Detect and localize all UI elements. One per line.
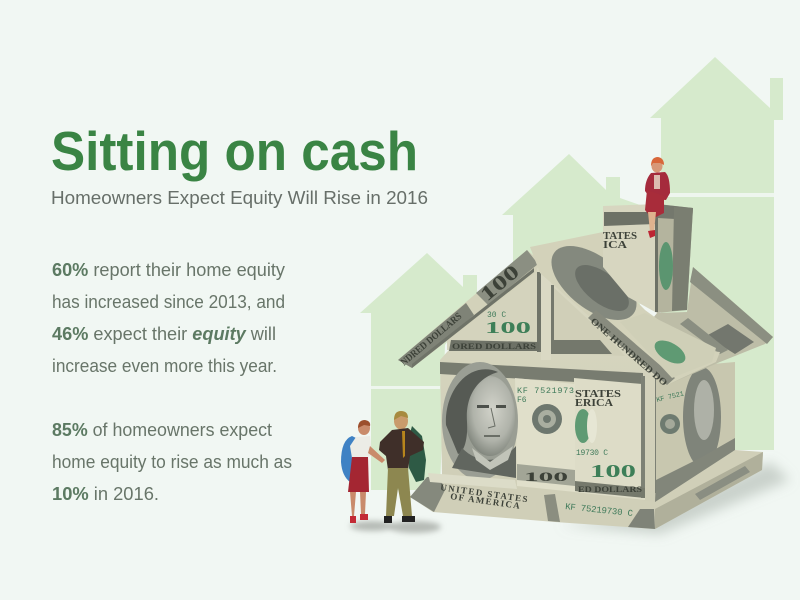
base of folded bills bbox=[410, 450, 763, 529]
left roof: 100 bbox=[476, 261, 524, 306]
front wall with bills bbox=[440, 255, 655, 502]
background arrows: rising green houses bbox=[360, 57, 783, 490]
right roof behind chimney bbox=[640, 267, 773, 385]
door bill with seal: F6 bbox=[517, 396, 527, 405]
text block: expectations: 85% of homeowners expect bbox=[52, 420, 272, 440]
text block: equity growth: has increased since 2013, and bbox=[52, 292, 285, 312]
couple shadows bbox=[350, 521, 441, 533]
chimney: TATES bbox=[603, 230, 637, 242]
text block: expectations: home equity to rise as much as bbox=[52, 452, 292, 472]
door bill with seal: KF 7521973 bbox=[517, 386, 574, 396]
hair and head bbox=[652, 160, 662, 172]
text block: equity growth: 46% expect their equity will bbox=[52, 324, 276, 344]
front wall with bills: 19730 C bbox=[576, 449, 608, 458]
centre strip bbox=[541, 265, 551, 360]
side wall: KF 7521 bbox=[656, 390, 685, 405]
side wall bbox=[645, 362, 735, 502]
base of folded bills: UNITED STATES bbox=[440, 482, 528, 504]
left gable bill bbox=[447, 268, 541, 350]
large house arrow bbox=[650, 57, 783, 450]
text block: expectations bbox=[52, 420, 292, 504]
chimney: ICA bbox=[603, 239, 627, 251]
front wall with bills: STATES bbox=[575, 388, 621, 400]
door bill with seal bbox=[515, 378, 575, 492]
jacket bbox=[645, 172, 670, 200]
door bill with seal: 100 bbox=[524, 469, 568, 484]
figure: woman on chimney bbox=[645, 157, 670, 238]
front wall with bills: ORED DOLLARS bbox=[452, 341, 536, 351]
front wall with bills: 100 bbox=[590, 461, 636, 481]
text block: expectations: 10% in 2016. bbox=[52, 484, 159, 504]
Franklin portrait bbox=[428, 362, 518, 489]
main roof front slope with folded portrait bbox=[530, 232, 720, 389]
man bbox=[379, 411, 426, 523]
main roof front slope with folded portrait: ONE HUNDRED DO bbox=[588, 317, 669, 389]
middle house arrow bbox=[502, 154, 640, 320]
base of folded bills: OF AMERICA bbox=[450, 491, 521, 511]
woman bbox=[341, 420, 385, 523]
left roof bbox=[398, 250, 541, 368]
top band of front bills bbox=[440, 362, 643, 388]
front wall with bills: 30 C bbox=[487, 311, 506, 320]
title: Sitting on cash bbox=[51, 120, 418, 182]
text block: equity growth: 60% report their home equity bbox=[52, 260, 285, 280]
right gable bill bbox=[551, 285, 625, 356]
text block: equity growth: increase even more this year. bbox=[52, 356, 277, 376]
small house arrow bbox=[360, 253, 477, 490]
chimney bbox=[603, 204, 693, 313]
front wall with bills: ERICA bbox=[575, 397, 613, 409]
subtitle: Homeowners Expect Equity Will Rise in 2016 bbox=[51, 187, 428, 208]
base of folded bills: KF 75219730 C bbox=[565, 502, 634, 519]
text block: equity growth bbox=[52, 260, 285, 376]
left roof: NDRED DOLLARS bbox=[399, 311, 464, 368]
front wall with bills: 100 bbox=[485, 318, 531, 337]
leg and shoe bbox=[648, 212, 656, 232]
house shadow bbox=[560, 462, 790, 534]
money house illustration bbox=[398, 204, 790, 534]
front wall with bills: ED DOLLARS bbox=[578, 485, 643, 494]
figures: couple bbox=[341, 411, 441, 533]
right bill bbox=[574, 378, 645, 500]
